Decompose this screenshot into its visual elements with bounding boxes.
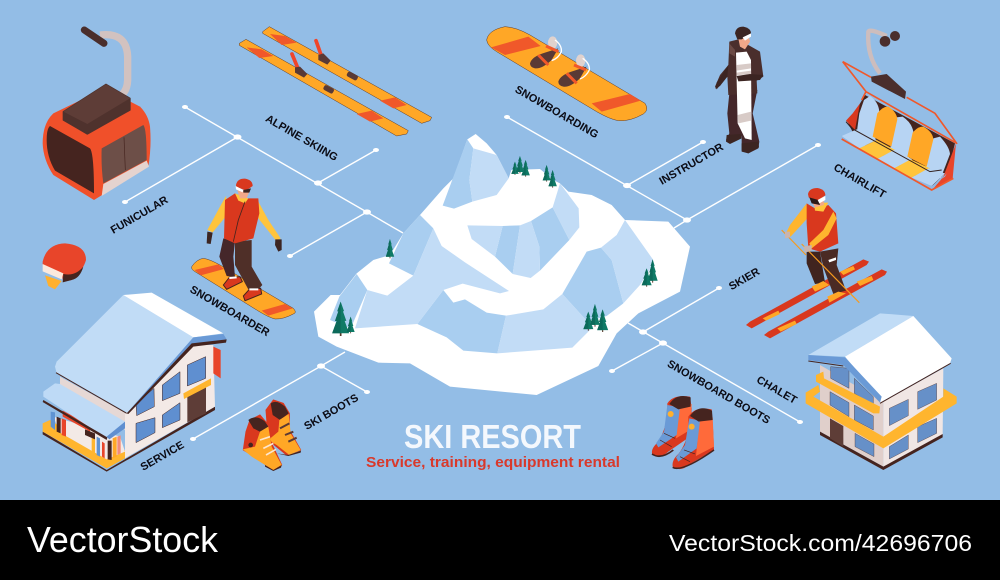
icon: helmet <box>43 243 86 289</box>
icon: snowboard boots <box>652 396 714 469</box>
title: SKI RESORT <box>404 418 581 455</box>
labels <box>109 84 888 474</box>
icon: snowboard <box>487 27 647 121</box>
icon: service building <box>43 293 227 472</box>
labels: FUNICULAR <box>109 194 170 237</box>
mountain <box>314 134 690 395</box>
watermark logo text: VectorStock <box>27 519 219 560</box>
icon: alpine skis <box>239 27 432 136</box>
icon: chairlift <box>842 31 957 191</box>
labels: SERVICE <box>139 439 186 474</box>
icon: instructor with snowboard <box>715 27 763 153</box>
icon: skier figure <box>746 259 887 338</box>
subtitle: Service, training, equipment rental <box>366 454 620 471</box>
icon: chalet <box>806 313 957 470</box>
labels: SNOWBOARDER <box>188 284 271 339</box>
connector lines <box>122 105 821 441</box>
pine trees <box>332 156 658 336</box>
icon: funicular gondola <box>43 30 151 200</box>
labels: CHAIRLIFT <box>831 162 888 201</box>
watermark band <box>0 500 1000 580</box>
labels: CHALET <box>754 374 799 407</box>
labels: SNOWBOARDING <box>513 84 600 141</box>
labels: ALPINE SKIING <box>263 113 340 164</box>
watermark url text: VectorStock.com/42696706 <box>669 530 972 556</box>
icon: ski boots <box>243 400 301 471</box>
labels: INSTRUCTOR <box>657 141 726 188</box>
labels: SKIER <box>727 266 762 293</box>
labels: SNOWBOARD BOOTS <box>665 358 772 427</box>
icon: snowboarder figure <box>192 179 295 319</box>
ice facets <box>330 139 653 353</box>
snow silhouette <box>314 134 690 395</box>
labels: SKI BOOTS <box>302 392 361 433</box>
